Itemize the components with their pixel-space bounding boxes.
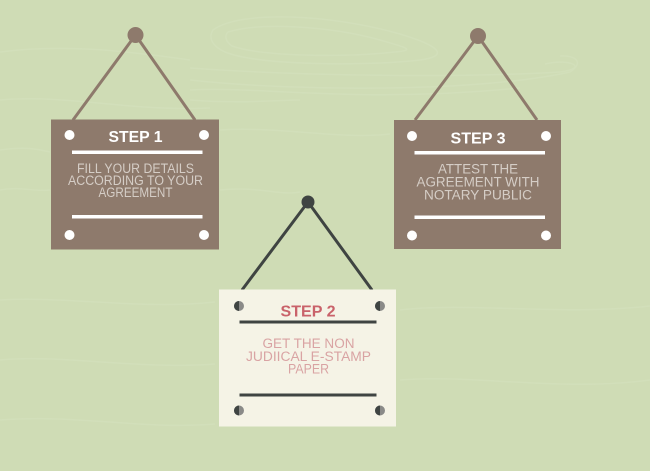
divider: [72, 215, 202, 218]
screws: [407, 131, 551, 240]
nail: [302, 196, 314, 208]
hanging cord: [242, 202, 372, 290]
divider: [240, 320, 376, 324]
description: GET THE NON: [262, 336, 354, 351]
description: AGREEMENT: [98, 185, 172, 200]
divider: [240, 394, 376, 396]
divider: [414, 216, 545, 219]
description: JUDIICAL E-STAMP: [246, 349, 371, 364]
heading: STEP 3: [450, 130, 506, 148]
description: NOTARY PUBLIC: [424, 188, 532, 202]
description: FILL YOUR DETAILS: [77, 161, 194, 176]
description: ATTEST THE: [438, 162, 518, 176]
description: [68, 161, 203, 200]
hanging cord: [415, 36, 537, 120]
sign: step 2: [219, 196, 396, 426]
heading: STEP 1: [108, 129, 163, 146]
board: [51, 120, 219, 250]
description: [416, 162, 540, 202]
divider: [414, 151, 545, 154]
hanging cord: [73, 35, 195, 120]
nail: [128, 27, 144, 43]
sign: step 1: [51, 27, 219, 250]
screws: [234, 301, 385, 416]
heading: STEP 2: [280, 304, 336, 320]
nail: [470, 28, 486, 44]
screws: [64, 130, 209, 240]
description: AGREEMENT WITH: [416, 174, 540, 190]
board: [394, 120, 561, 249]
description: [246, 336, 371, 376]
description: ACCORDING TO YOUR: [68, 173, 203, 188]
board: [219, 290, 396, 426]
description: PAPER: [288, 362, 329, 376]
sign: step 3: [394, 28, 561, 249]
divider: [72, 150, 202, 154]
